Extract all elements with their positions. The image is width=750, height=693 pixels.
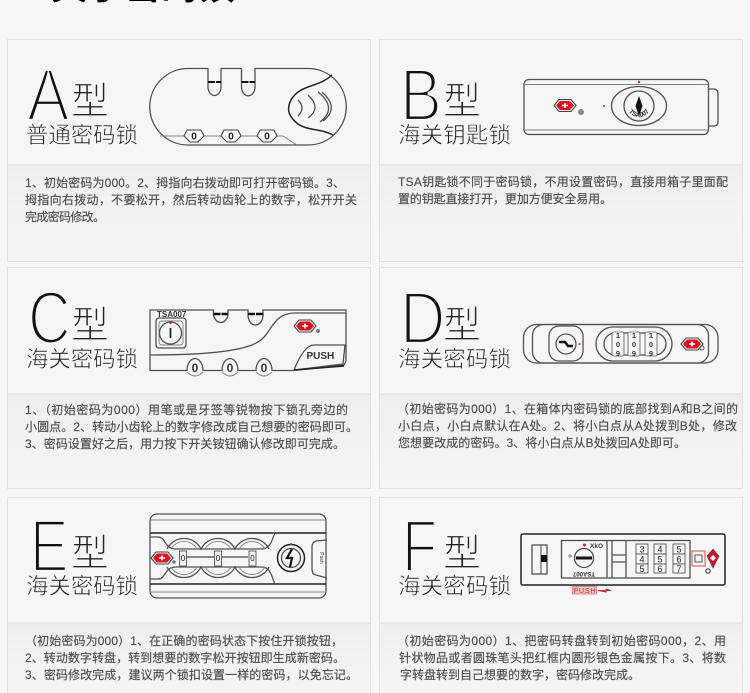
heading: D <box>398 277 511 372</box>
text: E instructions: 2、转动数字转盘，转到想要的数字松开按钮即生成新密码。 <box>25 650 345 665</box>
icon: lock F: 5 <box>639 564 645 574</box>
icon: lock C: TSA007 <box>157 310 187 319</box>
icon: lock F: 4 <box>657 544 663 554</box>
icon: lock F: 7 <box>676 564 682 574</box>
heading: F: 型 <box>443 533 481 575</box>
heading: A: 普通密码锁 <box>26 123 138 148</box>
icon: lock C: 0 <box>261 361 268 375</box>
icon: lock B <box>523 78 719 136</box>
text: B instructions: TSA钥匙锁不同于密码锁，不用设置密码，直接用箱子里面配 <box>398 174 728 189</box>
text: A instructions: 拇指向右拨动，不要松开，然后转动齿轮上的数字，松开开关 <box>25 192 357 207</box>
icon: lock F: PUSH <box>574 588 596 595</box>
icon: lock F: TSA007 <box>572 570 595 576</box>
icon: lock B: TSA007 <box>630 108 648 118</box>
heading: B <box>398 54 511 148</box>
heading: F: F <box>402 506 437 588</box>
heading: B: 海关钥匙锁 <box>398 123 511 148</box>
panel: type E <box>8 498 370 693</box>
text: F instructions: 字转盘转到自己想要的数字，密码修改完成。 <box>400 667 640 682</box>
heading: C: C <box>28 277 71 360</box>
text: A instructions <box>25 175 357 224</box>
text: A instructions: 完成密码修改。 <box>25 209 105 224</box>
heading: E: E <box>30 506 69 588</box>
icon: lock C: 0 <box>227 361 234 375</box>
icon: lock D: 0 <box>649 340 653 349</box>
icon: lock F: XkO <box>590 543 603 550</box>
text: B instructions <box>398 174 728 206</box>
icon: lock F: 6 <box>657 564 663 574</box>
heading: A <box>26 54 138 148</box>
heading: B: 型 <box>443 81 481 123</box>
text: F instructions: 针状物品或者圆珠笔头把红框内圆形银色金属按下。3、将数 <box>399 650 726 665</box>
icon: lock F: 3 <box>639 544 645 554</box>
icon: lock D: 0 <box>616 340 620 349</box>
text: E instructions: （初始密码为000）1、在正确的密码状态下按住开锁按钮， <box>25 633 343 648</box>
icon: lock E <box>150 514 327 598</box>
icon: lock F <box>521 534 725 595</box>
text: D instructions: 您想要改成的密码。3、将小白点从B处拨回A处即可。 <box>398 435 686 450</box>
icon: lock D: 1 <box>632 331 636 340</box>
icon: lock D: 9 <box>616 349 620 358</box>
heading: D: 海关密码锁 <box>398 347 511 372</box>
heading: D: 型 <box>443 305 481 347</box>
text: F instructions <box>397 633 726 682</box>
icon: lock E: 0 <box>181 554 186 563</box>
text: D instructions: 小白点，小白点默认在A处。2、将小白点从A处拨到B处，修改 <box>398 418 737 433</box>
icon: lock F: 5 <box>676 544 682 554</box>
text: E instructions: 3、密码修改完成，建议两个锁扣设置一样的密码，以免忘记。 <box>25 667 358 682</box>
heading: A: 型 <box>71 81 109 123</box>
text: C instructions: 1、（初始密码为000）用笔或是牙签等锐物按下锁孔旁边的 <box>25 402 348 417</box>
icon: lock A: 0 <box>264 132 270 142</box>
text: F instructions: （初始密码为000）1、把密码转盘转到初始密码000，2、用 <box>397 633 726 648</box>
heading: F <box>398 506 511 599</box>
heading: E: 型 <box>71 533 109 575</box>
heading: B: B <box>400 54 442 137</box>
icon: lock D <box>524 324 718 363</box>
icon: lock A: 0 <box>228 132 234 142</box>
icon: lock D: 0 <box>632 340 636 349</box>
icon: lock E: 0 <box>250 554 255 563</box>
heading: E <box>26 506 138 599</box>
icon: lock C <box>150 310 346 376</box>
icon: lock F: 6 <box>676 554 682 564</box>
icon: lock C: PUSH <box>306 351 334 362</box>
panel: type A <box>8 40 370 262</box>
panel: type F <box>380 498 742 693</box>
panel: type B <box>379 39 743 262</box>
heading: C: 海关密码锁 <box>26 347 138 372</box>
panel: type D <box>380 268 742 488</box>
icon: lock D: 1 <box>649 331 653 340</box>
icon: lock D: 1 <box>616 331 620 340</box>
icon: lock A <box>150 68 346 145</box>
text: C instructions: 3、密码设置好之后，用力按下开关铵钮确认修改即可完成。 <box>25 436 345 451</box>
icon: lock D: 9 <box>649 349 653 358</box>
icon: lock E: Push <box>318 552 324 564</box>
heading: E: 海关密码锁 <box>26 574 138 599</box>
icon: lock F: 5 <box>657 554 663 564</box>
icon: lock F: 4 <box>639 554 645 564</box>
text: A instructions: 1、初始密码为000。2、拇指向右拨动即可打开密码锁。3、 <box>25 175 345 190</box>
icon: lock C: 0 <box>192 361 199 375</box>
text: B instructions: 置的钥匙直接打开，更加方便安全易用。 <box>398 191 612 206</box>
heading: D: D <box>400 277 445 360</box>
icon: lock E: 0 <box>216 554 221 563</box>
heading: C <box>26 277 138 372</box>
text: D instructions: （初始密码为000）1、在箱体内密码锁的底部找到A和B之间的 <box>397 401 738 416</box>
text: C instructions: 小圆点。2、转动小齿轮上的数字修改成自己想要的密码即可。 <box>25 419 358 434</box>
icon: lock A: 0 <box>191 132 197 142</box>
icon: lock D: 9 <box>632 349 636 358</box>
heading: A: A <box>27 54 69 137</box>
text: D instructions <box>397 401 738 450</box>
panel: type C <box>8 268 370 488</box>
heading: C: 型 <box>71 305 109 347</box>
heading: F: 海关密码锁 <box>398 574 511 599</box>
text: C instructions <box>25 402 358 451</box>
text: E instructions <box>25 633 358 682</box>
